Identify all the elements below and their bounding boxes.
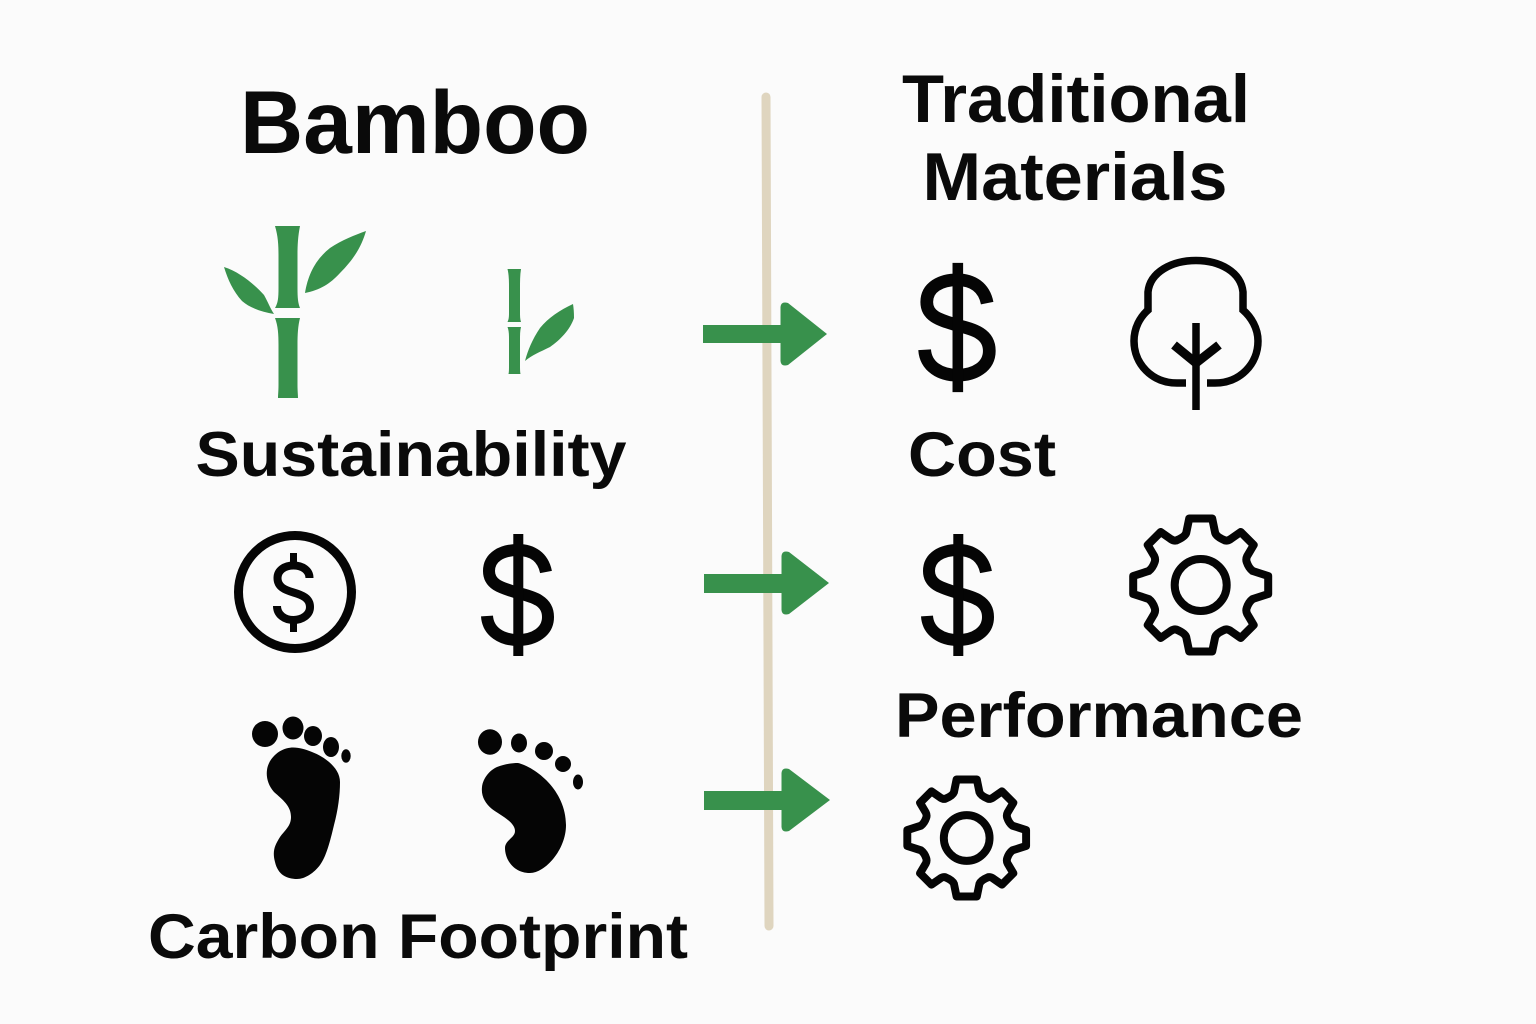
label: Performance: Performance: [895, 681, 1303, 751]
icon: dollar sign: [487, 534, 548, 656]
icon: dollar coin: [238, 536, 352, 648]
arrow: row 3: [704, 768, 830, 832]
heading: Traditional Materials: Materials: [922, 139, 1228, 215]
icon: gear small: [907, 779, 1026, 897]
arrow: row 2: [704, 552, 829, 614]
arrow: row 1: [703, 302, 827, 366]
icon: gear large: [1133, 518, 1268, 652]
heading: Bamboo: Bamboo: [240, 72, 590, 172]
label: Sustainability: Sustainability: [196, 420, 626, 490]
icon: dollar right row 1: [925, 263, 989, 392]
label: Cost: Cost: [908, 420, 1056, 490]
icon: footprint left: [252, 716, 351, 879]
icon: large bamboo: [224, 226, 366, 398]
icon: footprint right: [478, 729, 583, 873]
label: Carbon Footprint: Carbon Footprint: [148, 902, 688, 972]
icon: dollar right row 2: [927, 534, 988, 656]
heading: Traditional Materials: Traditional: [902, 61, 1250, 137]
heading: Traditional Materials: [902, 61, 1250, 215]
icon: tree: [1134, 260, 1258, 410]
icon: small bamboo: [508, 269, 574, 374]
